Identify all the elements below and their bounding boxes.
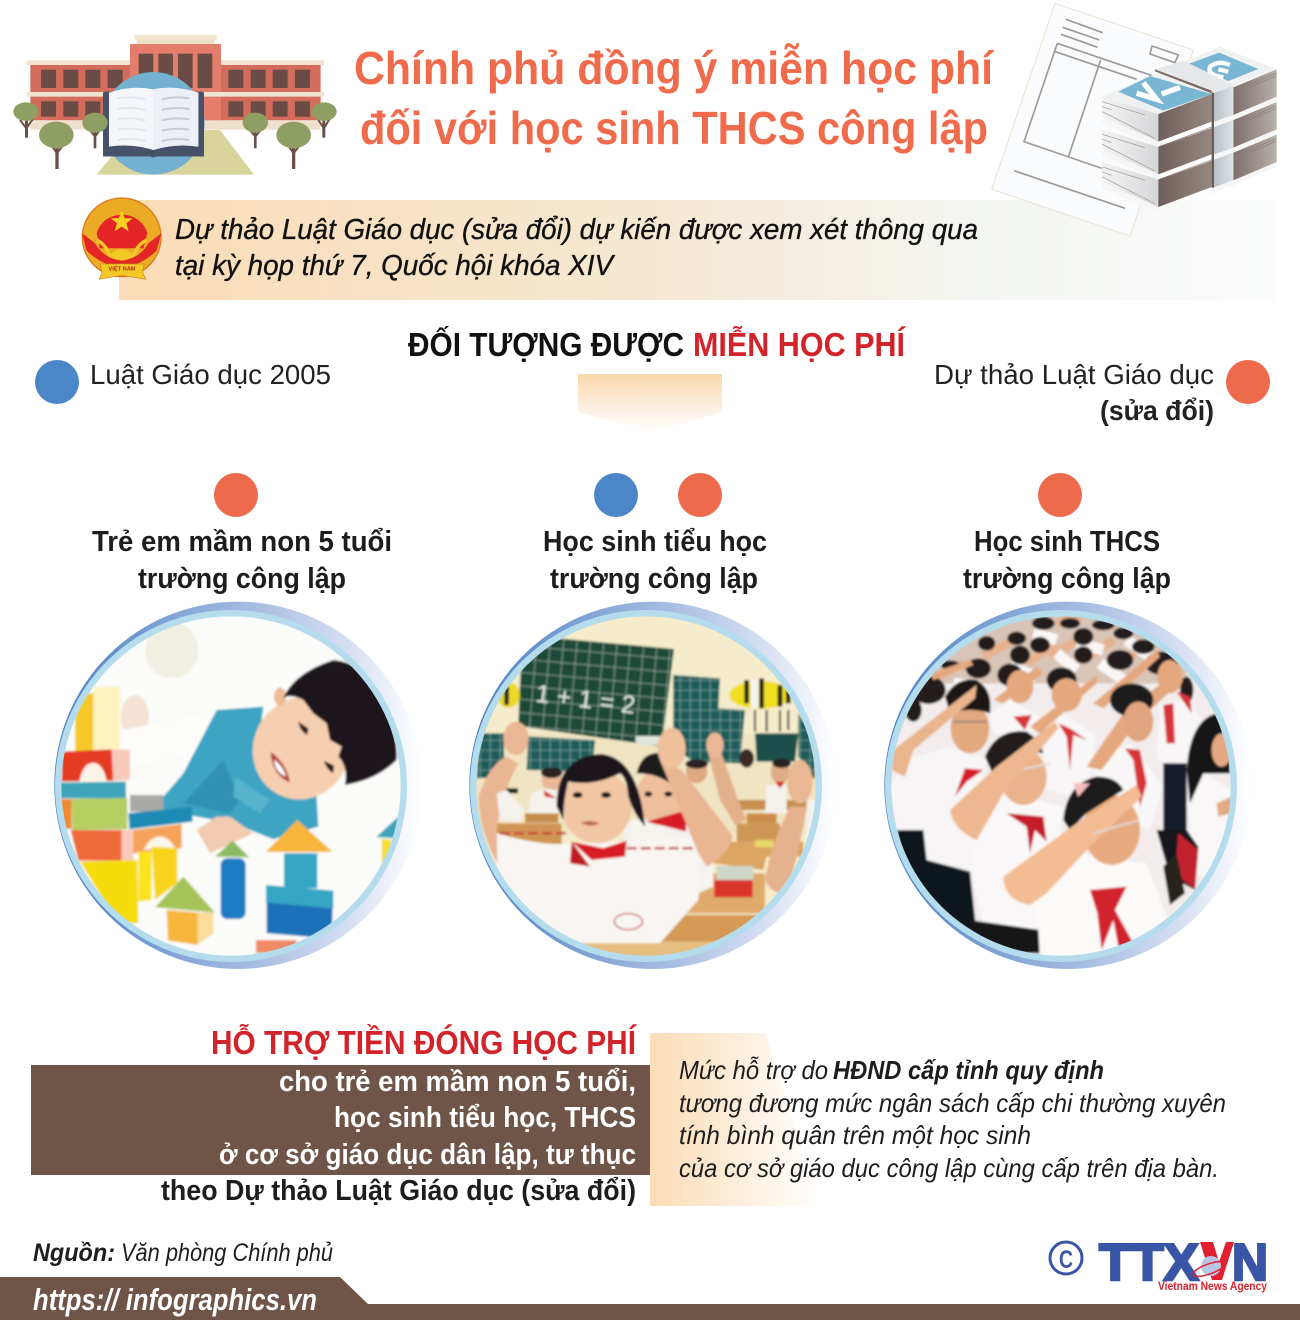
group: preschool children — [92, 473, 392, 595]
source note — [33, 1239, 333, 1267]
icon: national emblem of Vietnam — [82, 198, 161, 279]
legend: amended draft law: (sửa đổi) — [1100, 395, 1214, 426]
photo: primary pupils raising chalkboards: 1+1=2 — [534, 680, 637, 720]
group: primary pupils: Học sinh tiểu học — [543, 526, 767, 558]
logo: TTXVN: Vietnam News Agency — [1158, 1279, 1267, 1293]
group: primary pupils: trường công lập — [550, 563, 758, 595]
group: lower secondary pupils: trường công lập — [963, 563, 1171, 595]
group: primary pupils — [543, 473, 767, 595]
heading: exempted subjects: MIỄN HỌC PHÍ — [693, 326, 906, 363]
legend: amended draft law: Dự thảo Luật Giáo dục — [934, 359, 1214, 390]
title: đối với học sinh THCS công lập — [360, 102, 988, 154]
panel: support level explanation: Mức hỗ trợ do — [679, 1055, 828, 1085]
legend: Education Law 2005: Luật Giáo dục 2005 — [90, 359, 331, 390]
group: lower secondary pupils: Học sinh THCS — [974, 526, 1160, 558]
banner text: Dự thảo Luật Giáo dục (sửa đổi) dự kiến được xem xét thông qua — [175, 214, 978, 246]
legend: Education Law 2005 — [35, 359, 331, 404]
illustration: school building with open book — [13, 35, 337, 175]
group: preschool children: trường công lập — [138, 563, 346, 595]
panel: support recipients: cho trẻ em mầm non 5 tuổi, — [279, 1066, 636, 1098]
panel: support level explanation: tính bình quân trên một học sinh — [679, 1120, 1031, 1150]
title: Chính phủ đồng ý miễn học phí — [354, 42, 995, 94]
legend: amended draft law — [934, 359, 1270, 426]
arrow: pointing down — [578, 374, 722, 432]
footer bar with website: https:// infographics.vn — [33, 1282, 317, 1317]
title — [354, 42, 995, 154]
logo: TTXVN — [1050, 1234, 1268, 1293]
source note: Văn phòng Chính phủ — [121, 1239, 333, 1267]
banner text — [175, 214, 978, 282]
footer bar with website — [0, 1277, 1300, 1320]
logo: TTXVN: TTX — [1099, 1234, 1199, 1292]
group: lower secondary pupils — [963, 473, 1171, 595]
panel: support recipients: theo Dự thảo Luật Giáo dục (sửa đổi) — [161, 1175, 636, 1207]
heading: exempted subjects: ĐỐI TƯỢNG ĐƯỢC — [408, 325, 684, 363]
panel: support recipients: học sinh tiểu học, THCS — [334, 1102, 636, 1134]
banner: draft education law — [119, 200, 1276, 300]
panel: support recipients: ở cơ sở giáo dục dân lập, tư thục — [219, 1139, 636, 1171]
panel: support level explanation: tương đương mức ngân sách cấp chi thường xuyên — [679, 1088, 1226, 1118]
banner text: tại kỳ họp thứ 7, Quốc hội khóa XIV — [175, 250, 616, 282]
logo: TTXVN: C — [1059, 1246, 1073, 1274]
panel: support level explanation: HĐND cấp tỉnh quy định — [833, 1055, 1104, 1085]
panel: support level explanation — [650, 1033, 1226, 1206]
heading: tuition support: HỖ TRỢ TIỀN ĐÓNG HỌC PHÍ — [211, 1024, 637, 1061]
panel: support level explanation: của cơ sở giáo dục công lập cùng cấp trên địa bàn. — [679, 1153, 1219, 1183]
illustration: invoice paper and money stack — [992, 3, 1277, 236]
photo: boy playing with blocks — [54, 602, 408, 969]
source note: Nguồn: — [33, 1239, 115, 1267]
icon: national emblem of Vietnam: VIỆT NAM — [108, 265, 136, 273]
group: preschool children: Trẻ em mầm non 5 tuổi — [92, 526, 392, 558]
photo: lower secondary pupils saluting — [884, 602, 1238, 969]
photo: primary pupils raising chalkboards — [469, 602, 822, 969]
panel: support recipients — [31, 1065, 650, 1207]
heading: exempted subjects — [408, 325, 906, 363]
logo: TTXVN: N — [1232, 1234, 1268, 1292]
